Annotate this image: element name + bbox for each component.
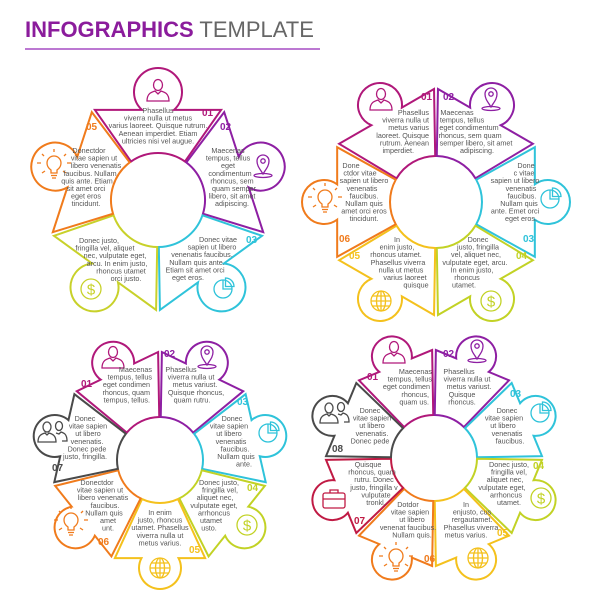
segment 06: amet orci eros [341, 207, 387, 216]
segment 03: Done [517, 161, 535, 170]
diagram 2: six segments [302, 59, 570, 345]
segment 02 [175, 99, 303, 248]
segment 05: metus varius. [445, 530, 487, 539]
segment 03: eget eros. [505, 214, 537, 223]
segment 05: 05 [86, 122, 98, 133]
segment 05 [413, 480, 520, 593]
segment 03: 03 [246, 235, 258, 246]
segment 06: tincidunt. [350, 214, 378, 223]
segment 06: vitae sapien ut [77, 486, 123, 495]
segment 05: libero venenatis [71, 161, 122, 170]
diagram 3: seven segments [24, 324, 296, 589]
diagram 1: five segments [13, 68, 303, 344]
segment 07: 07 [354, 516, 366, 527]
segment 05: varius laoreet [383, 273, 427, 282]
segment 06: libero venenatis [78, 493, 129, 502]
segment 08: venenatis. [356, 429, 388, 438]
segment 05 [115, 499, 205, 589]
segment 01: rutrum. Aenean [380, 138, 429, 147]
segment 04 [29, 194, 186, 344]
segment 01: metus varius [388, 123, 429, 132]
segment 04: Donec justo, [199, 478, 239, 487]
segment 06: faucibus. [350, 191, 378, 200]
segment 02: Quisque rhoncus, [168, 388, 224, 397]
segment 03: Nullam quis [500, 199, 538, 208]
segment 02: viverra nulla ut [444, 375, 490, 384]
segment 03 [456, 372, 569, 479]
segment 04: Donec justo, [489, 460, 529, 469]
segment 01: Maecenas [119, 365, 152, 374]
segment 03: 03 [237, 397, 249, 408]
segment 06: Nullam quis [345, 199, 383, 208]
segment 04: arcu. In enim justo, [87, 259, 147, 268]
segment 03: faucibus. [221, 444, 249, 453]
segment 07: rutru. Donec [354, 475, 394, 484]
segment 04: vulputate eget, [190, 501, 238, 510]
segment 05 [322, 209, 463, 345]
segment 05: Donectdor [72, 146, 106, 155]
segment 02: condimentum [208, 169, 252, 178]
segment 04: arrhoncus [490, 490, 522, 499]
segment 06 [31, 449, 158, 576]
segment 03: ut libero [490, 421, 516, 430]
segment 04: Donec [468, 235, 489, 244]
segment 05: In [463, 500, 469, 509]
segment 05: rergautamet. [452, 515, 492, 524]
segment 07: justo, fringilla v [349, 483, 398, 492]
segment 02: semper libero, sit amet [440, 138, 512, 147]
segment 02: 02 [164, 349, 176, 360]
segment 05: eget eros [71, 192, 101, 201]
segment 04: orci justo. [111, 274, 141, 283]
segment 02: Phasellus [443, 367, 475, 376]
segment 04: fringilla vel, [491, 468, 527, 477]
segment 03: vitae sapien [210, 422, 248, 431]
segment 02: rhoncus. [448, 397, 476, 406]
segment 02: 02 [443, 349, 455, 360]
segment 01: 01 [367, 372, 379, 383]
segment 07 [24, 387, 132, 495]
segment 01: varius laoreet. Quisque rutrum. [109, 121, 207, 130]
segment 06: Donectdor [80, 478, 114, 487]
segment 03: ante. Emet orci [491, 207, 540, 216]
segment 08: ut libero [359, 421, 385, 430]
segment 07: rhoncus, quam [348, 468, 396, 477]
segment 01: viverra nulla ut metus [124, 114, 193, 123]
segment 03: c vitae [514, 169, 534, 178]
segment 04: fringilla vel, aliquet [75, 244, 135, 253]
segment 04: utamet. [452, 281, 476, 290]
segment 07: justo, fringilla. [62, 452, 107, 461]
segment 04 [456, 437, 569, 544]
segment 05: justo, rhoncus [137, 516, 183, 525]
segment 02: eget condimentum [439, 123, 499, 132]
segment 02: Phasellus [165, 365, 197, 374]
segment 02: adipiscing. [460, 146, 494, 155]
segment 01: rhoncus, quam [102, 388, 150, 397]
segment 07: Donec [75, 414, 96, 423]
segment 03: vitae sapien [485, 414, 523, 423]
segment 02: adipiscing. [215, 199, 249, 208]
segment 06: Dotdor [397, 500, 419, 509]
segment 04: aliquet nec, [197, 493, 233, 502]
segment 06 [348, 480, 455, 593]
segment 05: 05 [349, 251, 361, 262]
segment 05: utamet. Phasellus [131, 523, 189, 532]
segment 07 [299, 437, 412, 544]
segment 04: $ [243, 518, 252, 534]
segment 03: faucibus. [508, 191, 536, 200]
segment 05: faucibus. Nullam [63, 169, 117, 178]
segment 08: vitae sapien [353, 414, 391, 423]
segment 06: Nullam quis [85, 508, 123, 517]
segment 05: In [394, 235, 400, 244]
segment 06: ut libero [399, 515, 425, 524]
segment 01: laoreet. Quisque [376, 131, 429, 140]
segment 04: aliquet nec, [487, 475, 523, 484]
segment 05 [13, 99, 141, 248]
segment 04: vulputate eget, [478, 483, 526, 492]
segment 05: sit amet orci [67, 184, 106, 193]
segment 04: $ [487, 294, 496, 310]
segment 08: 08 [332, 444, 344, 455]
segment 04: usto. [201, 524, 217, 533]
segment 07: tronkl. [366, 498, 386, 507]
segment 06: venenatis [347, 184, 378, 193]
segment 03 [476, 147, 570, 257]
segment 04: $ [87, 282, 96, 298]
segment 01 [95, 68, 221, 162]
segment 05: enjusto, cus [453, 508, 492, 517]
segment 06: 06 [339, 234, 351, 245]
segment 02: quam semper [212, 184, 257, 193]
segment 01: eget condimen [103, 380, 150, 389]
segment 01: tempus, tellus [108, 373, 152, 382]
segment 04: arrhoncus [198, 508, 230, 517]
segment 04: rhoncus [454, 273, 480, 282]
segment 06: 06 [98, 537, 110, 548]
diagram 4: eight segments [299, 323, 569, 593]
segment 01: eget condimen [383, 382, 430, 391]
segment 02: rhoncus, sem quam [438, 131, 502, 140]
segment 01 [63, 324, 184, 444]
segment 07: vitae sapien [69, 422, 107, 431]
segment 05: enim justo, [380, 243, 414, 252]
segment 01 [322, 59, 463, 195]
segment 03: Etiam sit amet orci [165, 265, 225, 274]
segment 03: venenatis faucibus. [171, 250, 233, 259]
segment 04: Donec justo, [79, 236, 119, 245]
segment 02: metus variust. [173, 380, 217, 389]
segment 03: eget eros. [172, 273, 204, 282]
segment 03: Nullam quis [217, 452, 255, 461]
segment 03: venenatis [216, 437, 247, 446]
segment 07: 07 [52, 463, 64, 474]
segment 02 [136, 324, 257, 444]
segment 02: Maecenas [211, 146, 245, 155]
segment 01: imperdiet. [382, 146, 414, 155]
segment 02: tempus, tellus [440, 116, 485, 125]
segment 04: In enim justo, [451, 265, 493, 274]
segment 03: venenatis [506, 184, 537, 193]
segment 05: metus varius. [139, 538, 181, 547]
segment 04: 04 [516, 251, 528, 262]
segment 03 [130, 194, 287, 344]
segment 02: rhoncus, sem [210, 176, 254, 185]
segment 01: Maecenas [399, 367, 432, 376]
segment 05: 05 [497, 528, 509, 539]
segment 03: sapien ut libero [491, 176, 539, 185]
segment 05: tincidunt. [72, 199, 100, 208]
segment 01 [348, 323, 455, 436]
segment 05: Phasellus viverra [444, 523, 498, 532]
segment 06: faucibus. [91, 501, 119, 510]
segment 06: Done [342, 161, 360, 170]
segment 04: 04 [533, 461, 545, 472]
segment 08 [299, 372, 412, 479]
segment 01: Phasellus [142, 106, 174, 115]
segment 04: utamet. [497, 498, 521, 507]
segment 06: amet [100, 516, 116, 525]
segment 01: ultricies nisi vel augue. [122, 136, 194, 145]
segment 02 [409, 59, 550, 195]
segment 05: quisque [403, 281, 429, 290]
segment 04: utamet [200, 516, 222, 525]
segment 03: Donec vitae [199, 235, 237, 244]
segment 01: Phasellus [398, 108, 429, 117]
segment 04: $ [537, 490, 546, 508]
segment 06: Nullam quis. [392, 530, 432, 539]
segment 04: rhoncus utamet [96, 266, 146, 275]
segment 07: Donec pede [68, 444, 106, 453]
segment 04 [162, 449, 289, 576]
segment 02: quam rutru. [174, 395, 210, 404]
segment 02: metus variust. [447, 382, 491, 391]
segment 03: venenatis [492, 429, 523, 438]
segment 03: ut libero [216, 429, 242, 438]
segment 07: vulputate [361, 490, 391, 499]
segment 03: faucibus. [496, 436, 524, 445]
segment 05: 05 [189, 545, 201, 556]
segment 03: ante. [236, 460, 252, 469]
segment 04 [409, 209, 550, 345]
segment 06 [302, 147, 396, 257]
segment 01: 01 [81, 379, 93, 390]
segment 01: rhoncus, [401, 390, 429, 399]
segment 02: viverra nulla ut [168, 373, 214, 382]
segment 01: tempus, tellus [388, 375, 432, 384]
segment 08: Donec pede [351, 436, 389, 445]
segment 06: venenat faucibus. [380, 523, 436, 532]
segment 01: 01 [421, 92, 433, 103]
segment 06: 06 [424, 554, 436, 565]
segment 01: tempus, tellus. [104, 395, 150, 404]
title: INFOGRAPHICS TEMPLATE [25, 17, 314, 42]
segment 04: 04 [247, 483, 259, 494]
segment 01: quam us. [399, 397, 429, 406]
segment 03: Nullam quis ante. [169, 258, 225, 267]
segment 03 [188, 387, 296, 495]
segment 06: sapien ut libero [340, 176, 388, 185]
segment 03: sapien ut libero [188, 243, 236, 252]
segment 02: tempus, tellus [206, 154, 251, 163]
segment 01: 01 [202, 108, 214, 119]
segment 03: Donec [222, 414, 243, 423]
segment 08: Donec [360, 406, 381, 415]
segment 02: libero, sit amet [209, 192, 255, 201]
segment 03: 03 [510, 389, 522, 400]
segment 06: unt. [102, 524, 114, 533]
segment 04: justo, fringilla [456, 243, 499, 252]
segment 04: fringilla vel, [202, 486, 238, 495]
segment 05: nulla ut metus [379, 265, 424, 274]
segment 07: Quisque [355, 460, 381, 469]
segment 05: viverra nulla ut [137, 531, 183, 540]
segment 07: ut libero [75, 429, 101, 438]
segment 05: In enim [148, 508, 172, 517]
segment 02: Quisque [449, 390, 475, 399]
segment 04: nec, vulputate eget, [84, 251, 146, 260]
segment 06: ctdor vitae [343, 169, 377, 178]
segment 05: rhoncus utamet. [370, 250, 422, 259]
segment 01: viverra nulla ut [382, 116, 429, 125]
segment 02 [413, 323, 520, 436]
segment 02: 02 [220, 122, 232, 133]
segment 04: vel, aliquet nec, [451, 250, 501, 259]
segment 02: 02 [443, 92, 455, 103]
segment 01: Aenean imperdiet. Etiam [119, 129, 197, 138]
segment 03: 03 [523, 234, 535, 245]
segment 02: Maecenas [440, 108, 474, 117]
segment 03: Donec [497, 406, 518, 415]
segment 05: vitae sapien ut [71, 154, 117, 163]
segment 05: quis ante. Etiam [61, 176, 113, 185]
segment 02: eget [221, 161, 235, 170]
segment 05: Phasellus viverra [371, 258, 425, 267]
segment 07: venenatis. [71, 437, 103, 446]
segment 04: vulputate eget, arcu. [442, 258, 508, 267]
segment 06: vitae sapien [391, 508, 429, 517]
